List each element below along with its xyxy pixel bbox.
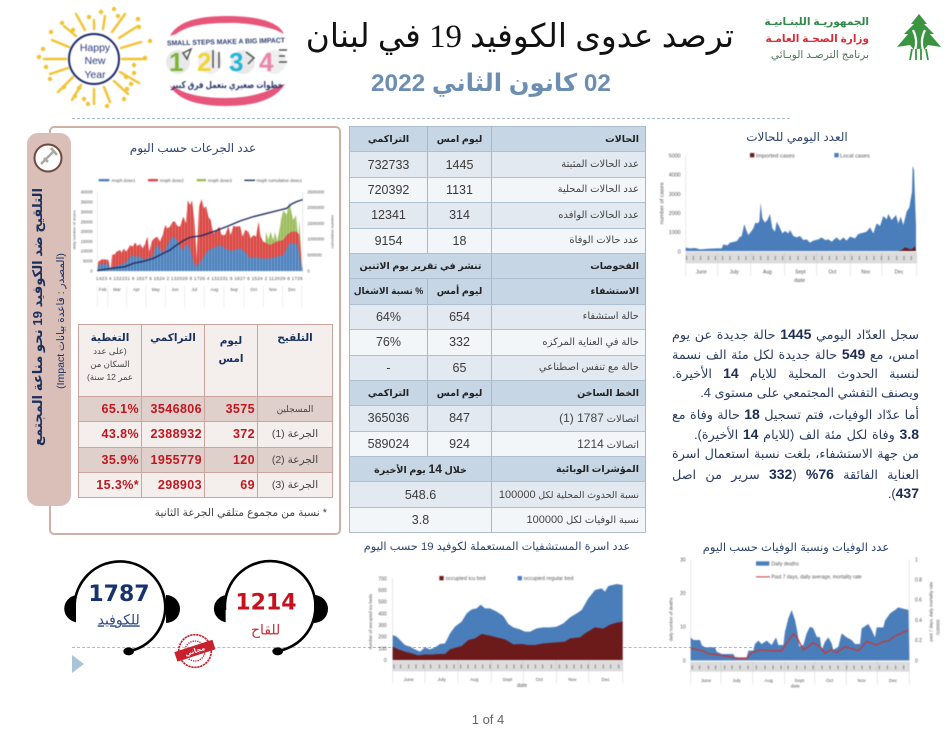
chart: daily cases: 0	[678, 249, 681, 255]
table: vaccination: 69	[240, 478, 255, 492]
chart: occupied hospital beds: 100	[378, 646, 387, 652]
table: vaccination: 65.1%	[102, 402, 139, 416]
heading: hospital beds chart: عدد اسرة المستشفيات المستعملة لكوفيد 19 حسب اليوم	[364, 541, 630, 553]
chart: daily vaccine doses: 5000	[83, 259, 93, 264]
table: cases, tests, hospitalisation, hotline, indicators: 720392	[368, 183, 409, 197]
chart: daily deaths and mortality rate: Sept	[795, 678, 805, 683]
icon: syringe badge	[34, 144, 62, 172]
chart: occupied hospital beds: 200	[378, 635, 387, 641]
chart: daily deaths and mortality rate: daily number of deaths	[669, 597, 674, 641]
table: cases, tests, hospitalisation, hotline, indicators: ليوم أمس	[437, 286, 482, 297]
table: cases, tests, hospitalisation, hotline, indicators: ليوم امس	[437, 134, 482, 145]
chart: daily deaths and mortality rate: 0	[915, 658, 918, 664]
chart: daily vaccine doses: Sep	[230, 287, 238, 292]
table: vaccination: عمر 12 سنة)	[87, 372, 133, 382]
chart: daily vaccine doses: 1500000	[307, 221, 325, 226]
table: cases, tests, hospitalisation, hotline, indicators: 654	[449, 310, 470, 324]
line 4: ويصنف التفشي المجتمعي على مستوى 4.	[700, 385, 919, 400]
table: vaccination: 1955779	[151, 453, 202, 467]
chart: daily deaths and mortality rate: Oct	[826, 678, 834, 683]
hotline: 1787 headset	[64, 560, 180, 656]
icon: happy new year fireworks badge: Year	[84, 69, 106, 81]
dashed divider	[72, 647, 772, 648]
line 5: أما عدّاد الوفيات، فتم تسجيل 18 حالة وفاة مع	[672, 406, 919, 422]
table: cases, tests, hospitalisation, hotline, indicators: % نسبة الاشغال	[354, 286, 423, 296]
hotline: 1214 headset: 1214	[235, 590, 297, 615]
icon: small steps make a big impact badge	[166, 15, 288, 107]
table: cases, tests, hospitalisation, hotline, indicators: التراكمي	[368, 388, 409, 399]
chart: daily deaths and mortality rate: 20	[680, 591, 686, 597]
icon: small steps make a big impact badge: خطوات صغيري بتعمل فرق كبير	[170, 80, 283, 91]
table: cases, tests, hospitalisation, hotline, indicators: الاستشفاء	[591, 286, 639, 297]
table: cases, tests, hospitalisation, hotline, indicators: 9154	[375, 234, 402, 248]
table: vaccination: امس	[219, 353, 243, 365]
chart: daily vaccine doses: 25000	[81, 219, 93, 224]
logo: ministry of public health	[764, 14, 941, 61]
chart: daily cases: 1000	[669, 230, 681, 236]
chart: daily cases: Nov	[861, 269, 871, 275]
chart: daily vaccine doses: Dec	[288, 287, 297, 292]
chart: daily cases: June	[696, 269, 707, 275]
line 1: سجل العدّاد اليومي 1445 حالة جديدة عن يوم	[672, 326, 919, 342]
vertical source note: (المصدر : قاعدة بيانات Impact)	[55, 253, 67, 389]
chart: occupied hospital beds	[368, 575, 624, 689]
chart: daily vaccine doses: Mar	[113, 287, 121, 292]
icon: toll free stamp: مجاني	[184, 645, 206, 658]
chart: occupied hospital beds: July	[438, 677, 446, 682]
chart: occupied hospital beds: Oct	[536, 677, 544, 682]
chart: daily cases: Dec	[895, 269, 904, 275]
chart: occupied hospital beds: 0	[384, 658, 387, 664]
chart: daily cases: 4000	[669, 173, 681, 179]
hotline: 1787 headset: للكوفيد	[98, 611, 140, 628]
chart: daily vaccine doses: Jul	[192, 287, 197, 292]
chart: daily cases	[659, 152, 918, 284]
chart: daily deaths and mortality rate	[668, 556, 940, 688]
table: vaccination: 35.9%	[102, 453, 139, 467]
chart: daily deaths and mortality rate: July	[733, 678, 741, 683]
hotline: 1214 headset: للقاح	[251, 621, 280, 638]
table: cases, tests, hospitalisation, hotline, indicators: 332	[449, 335, 470, 349]
chart: daily vaccine doses: 2000000	[307, 205, 325, 210]
chart: daily deaths and mortality rate: 0	[683, 658, 686, 664]
chart: daily vaccine doses: Jun	[172, 287, 179, 292]
chart: occupied hospital beds: Dec	[602, 677, 610, 682]
chart: daily deaths and mortality rate: 0.6	[915, 598, 922, 604]
chart: daily vaccine doses: 0	[307, 268, 310, 273]
chart: daily deaths and mortality rate: Dec	[889, 678, 898, 683]
chart: occupied hospital beds: date	[517, 683, 527, 689]
table: vaccination: الجرعة (2)	[272, 454, 318, 466]
dashed divider	[72, 118, 790, 119]
table: cases, tests, hospitalisation, hotline, indicators: اتصالات 1787 (1)	[559, 411, 639, 425]
logo text	[764, 16, 869, 61]
arrow: page navigation triangle	[72, 655, 84, 673]
chart: daily vaccine doses: cumulative number	[330, 214, 335, 249]
chart: occupied hospital beds: 300	[378, 623, 387, 629]
logo text: برنامج الترصـد الوبـائي	[771, 49, 869, 61]
table: cases, tests, hospitalisation, hotline, indicators: 64%	[376, 310, 401, 324]
chart: daily deaths and mortality rate: Daily deaths	[771, 561, 799, 567]
chart: occupied hospital beds: 700	[378, 576, 387, 582]
table: cases, tests, hospitalisation, hotline, indicators: عدد الحالات المثبتة	[561, 159, 639, 170]
chart: occupied hospital beds: 400	[378, 611, 387, 617]
heading: daily cases chart: العدد اليومي للحالات	[746, 130, 848, 144]
table: cases, tests, hospitalisation, hotline, indicators: عدد الحالات الوافده	[558, 210, 639, 221]
chart: daily deaths and mortality rate: date	[791, 683, 800, 688]
heading: daily doses chart: عدد الجرعات حسب اليوم	[130, 141, 256, 155]
chart: daily cases: July	[730, 269, 739, 275]
chart: daily vaccine doses: 15000	[81, 239, 93, 244]
icon: happy new year fireworks badge: Happy	[80, 42, 111, 54]
chart: daily deaths and mortality rate: 0.4	[915, 618, 922, 624]
table: vaccination: التغطية	[91, 332, 129, 344]
chart: daily vaccine doses: 30000	[81, 209, 93, 214]
chart: daily deaths and mortality rate: /100000	[935, 619, 940, 635]
table: vaccination	[78, 324, 333, 498]
icon: small steps make a big impact badge: 1	[169, 47, 183, 77]
line 3: لنسبة الحدوث المحلية للايام 14 الأخيرة.	[672, 365, 919, 381]
table: vaccination: (على عدد	[93, 346, 127, 356]
chart: daily deaths and mortality rate: past 7 days, daily mortality rate	[929, 581, 934, 642]
table: cases, tests, hospitalisation, hotline, indicators: 18	[453, 234, 466, 248]
chart: daily cases: 5000	[669, 154, 681, 160]
chart: occupied hospital beds: 500	[378, 600, 387, 606]
table: cases, tests, hospitalisation, hotline, indicators: نسبة الحدوث المحلية لكل 100000	[499, 489, 639, 501]
table: vaccination: التراكمي	[150, 332, 196, 344]
table: cases, tests, hospitalisation, hotline, indicators: اتصالات 1214	[577, 437, 639, 451]
table: cases, tests, hospitalisation, hotline, indicators: ليوم امس	[437, 388, 482, 399]
chart: daily deaths and mortality rate: 1	[915, 557, 918, 563]
table: cases, tests, hospitalisation, hotline, indicators: المؤشرات الوبائية	[556, 464, 639, 475]
chart: occupied hospital beds: occupied regular bed	[524, 576, 573, 582]
chart: daily vaccine doses: 1000000	[307, 237, 325, 242]
table: vaccination: 15.3%*	[96, 478, 139, 492]
chart: daily deaths and mortality rate: Nov	[858, 678, 866, 683]
chart: daily vaccine doses: 2500000	[307, 189, 325, 194]
page indicator: 1 of 4	[472, 712, 504, 727]
hotline: 1787 headset: 1787	[88, 582, 150, 607]
table: cases, tests, hospitalisation, hotline, indicators: التراكمي	[368, 134, 409, 145]
chart: daily deaths and mortality rate: 10	[680, 625, 686, 631]
vertical heading: التلقيح ضد الكوفيد 19 نحو مناعة المجتمع	[30, 188, 45, 446]
footnote: * نسبة من مجموع متلقي الجرعة الثانية	[155, 507, 327, 519]
table: cases, tests, hospitalisation, hotline, indicators: 548.6	[405, 488, 436, 502]
chart: daily vaccine doses: 1423 4 132231 9 1827 6 1524 2 132029 8 1726 4 132231 9 1827 6 1524 2 112029 8 1726	[96, 276, 303, 281]
chart: daily vaccine doses: 35000	[81, 199, 93, 204]
chart: daily deaths and mortality rate: 0.2	[915, 638, 922, 644]
table: cases, tests, hospitalisation, hotline, indicators: 3.8	[412, 513, 429, 527]
icon: toll free stamp	[174, 634, 216, 668]
table: cases, tests, hospitalisation, hotline, indicators: حالة في العناية المركزه	[542, 337, 639, 348]
table: cases, tests, hospitalisation, hotline, indicators: 1445	[446, 158, 473, 172]
icon: cedar tree	[897, 14, 941, 60]
hotline: 1214 headset	[214, 560, 328, 656]
table: cases, tests, hospitalisation, hotline, indicators: عدد الحالات المحلية	[558, 184, 639, 195]
table: cases, tests, hospitalisation, hotline, indicators: الفحوصات	[590, 261, 639, 272]
title: ترصد عدوى الكوفيد 19 في لبنان	[306, 19, 734, 55]
chart: daily vaccine doses: moph dose3	[208, 178, 232, 183]
chart: daily cases: Oct	[828, 269, 837, 275]
table: cases, tests, hospitalisation, hotline, indicators: نسبة الوفيات لكل 100000	[526, 514, 639, 526]
table: vaccination: السكان من	[90, 359, 130, 369]
table: cases, tests, hospitalisation, hotline, indicators	[349, 126, 646, 533]
chart: daily deaths and mortality rate: Aug	[765, 678, 773, 683]
table: vaccination: الجرعة (3)	[272, 479, 318, 491]
table: cases, tests, hospitalisation, hotline, indicators: الحالات	[605, 134, 639, 145]
icon: small steps make a big impact badge: 4	[259, 47, 274, 77]
chart: occupied hospital beds: Nov	[568, 677, 577, 682]
chart: daily vaccine doses: 500000	[307, 253, 322, 258]
chart: daily vaccine doses: daily number of doses	[71, 210, 76, 250]
chart: daily vaccine doses: moph dose1	[112, 178, 136, 183]
table: vaccination: الجرعة (1)	[272, 428, 318, 440]
chart: daily cases: 3000	[669, 192, 681, 198]
chart: daily cases: Aug	[763, 269, 772, 275]
icon: small steps make a big impact badge: SMALL STEPS MAKE A BIG IMPACT	[167, 37, 286, 48]
table: vaccination: 3575	[226, 402, 255, 416]
chart: daily deaths and mortality rate: June	[701, 678, 711, 683]
table: cases, tests, hospitalisation, hotline, indicators: عدد حالات الوفاة	[569, 235, 639, 246]
chart: daily cases: Imported cases	[756, 153, 795, 159]
chart: daily vaccine doses: May	[152, 287, 161, 292]
chart: daily vaccine doses: moph dose2	[160, 178, 184, 183]
chart: occupied hospital beds: Sept	[503, 677, 513, 682]
table: vaccination: 372	[233, 427, 255, 441]
chart: daily deaths and mortality rate: 30	[680, 557, 686, 563]
table: vaccination: المسجلين	[277, 404, 313, 414]
table: vaccination: ليوم	[220, 335, 242, 347]
chart: daily deaths and mortality rate: 0.8	[915, 577, 922, 583]
icon: happy new year fireworks badge: New	[84, 55, 106, 67]
chart: daily vaccine doses: Feb	[99, 287, 107, 292]
table: cases, tests, hospitalisation, hotline, indicators: الخط الساخن	[577, 388, 639, 399]
line 2: امس، مع 549 حالة جديدة لكل مئة الف نسمة	[672, 346, 919, 362]
chart: daily vaccine doses: Aug	[210, 287, 219, 292]
table: cases, tests, hospitalisation, hotline, indicators: 365036	[368, 411, 409, 425]
chart: daily cases: 2000	[669, 211, 681, 217]
chart: occupied hospital beds: June	[404, 677, 414, 682]
chart: daily vaccine doses: Oct	[250, 287, 258, 292]
table: vaccination: 120	[233, 453, 255, 467]
table: cases, tests, hospitalisation, hotline, indicators: 65	[453, 361, 466, 375]
chart: occupied hospital beds: occupied icu bed	[446, 576, 486, 582]
chart: occupied hospital beds: number of occupied icu beds	[368, 594, 373, 649]
table: cases, tests, hospitalisation, hotline, indicators: 314	[449, 208, 470, 222]
chart: daily vaccine doses: 20000	[81, 229, 93, 234]
chart: daily vaccine doses	[71, 178, 335, 307]
table: cases, tests, hospitalisation, hotline, indicators: 732733	[368, 158, 409, 172]
chart: daily cases: Local cases	[840, 153, 870, 159]
table: vaccination: 2388932	[151, 427, 202, 441]
table: cases, tests, hospitalisation, hotline, indicators: 847	[449, 411, 470, 425]
chart: daily cases: Sept	[795, 269, 806, 275]
chart: daily vaccine doses: Nov	[269, 287, 278, 292]
line 8: العناية الفائقة 76% (332 سرير من اصل	[672, 466, 919, 482]
table: cases, tests, hospitalisation, hotline, indicators: -	[386, 361, 391, 375]
icon: happy new year fireworks badge	[36, 6, 153, 109]
icon: small steps make a big impact badge: 2	[197, 47, 211, 77]
date subtitle: 02 كانون الثاني 2022	[371, 70, 611, 97]
icon: small steps make a big impact badge: 3	[229, 47, 243, 77]
table: cases, tests, hospitalisation, hotline, indicators: 76%	[376, 335, 401, 349]
table: vaccination: 298903	[158, 478, 202, 492]
line 6: 3.8 وفاة لكل مئة الف (للايام 14 الأخيرة).	[694, 426, 919, 442]
chart: daily cases: date	[794, 278, 805, 284]
chart: daily vaccine doses: moph cumulative dose1	[256, 178, 303, 183]
table: cases, tests, hospitalisation, hotline, indicators: تنشر في تقرير يوم الاثنين	[360, 261, 481, 272]
chart: daily vaccine doses: Apr	[133, 287, 140, 292]
table: cases, tests, hospitalisation, hotline, indicators: 589024	[368, 437, 409, 451]
table: vaccination: 3546806	[151, 402, 202, 416]
line 9: 437).	[888, 485, 919, 501]
heading: deaths chart: عدد الوفيات ونسبة الوفيات حسب اليوم	[703, 542, 889, 554]
table: cases, tests, hospitalisation, hotline, indicators: خلال 14 يوم الأخيرة	[374, 462, 467, 476]
panel: vaccination	[49, 126, 341, 535]
chart: daily vaccine doses: 0	[90, 268, 93, 273]
line 7: من جهة الاستشفاء، بلغت نسبة استعمال اسرة	[672, 446, 919, 461]
table: cases, tests, hospitalisation, hotline, indicators: حالة استشفاء	[583, 311, 639, 322]
logo text: الجمهوريـة اللبنـانيـة	[764, 16, 869, 28]
table: vaccination: 43.8%	[102, 427, 139, 441]
table: cases, tests, hospitalisation, hotline, indicators: 924	[449, 437, 470, 451]
chart: daily vaccine doses: 10000	[81, 249, 93, 254]
table: cases, tests, hospitalisation, hotline, indicators: حالة مع تنفس اصطناعي	[539, 362, 639, 373]
chart: occupied hospital beds: 600	[378, 588, 387, 594]
table: vaccination: التلقيح	[277, 332, 313, 344]
logo text: وزارة الصحـة العامـة	[765, 32, 869, 44]
chart: daily vaccine doses: 40000	[81, 189, 93, 194]
panel: vaccination side banner	[27, 133, 71, 506]
table: cases, tests, hospitalisation, hotline, indicators: 12341	[371, 208, 406, 222]
text block: daily summary	[672, 326, 919, 501]
chart: daily cases: number of cases	[659, 182, 665, 224]
chart: daily deaths and mortality rate: Past 7 days, daily average, mortality rate	[771, 575, 862, 581]
table: cases, tests, hospitalisation, hotline, indicators: 1131	[446, 183, 473, 197]
chart: occupied hospital beds: Aug	[470, 677, 479, 682]
